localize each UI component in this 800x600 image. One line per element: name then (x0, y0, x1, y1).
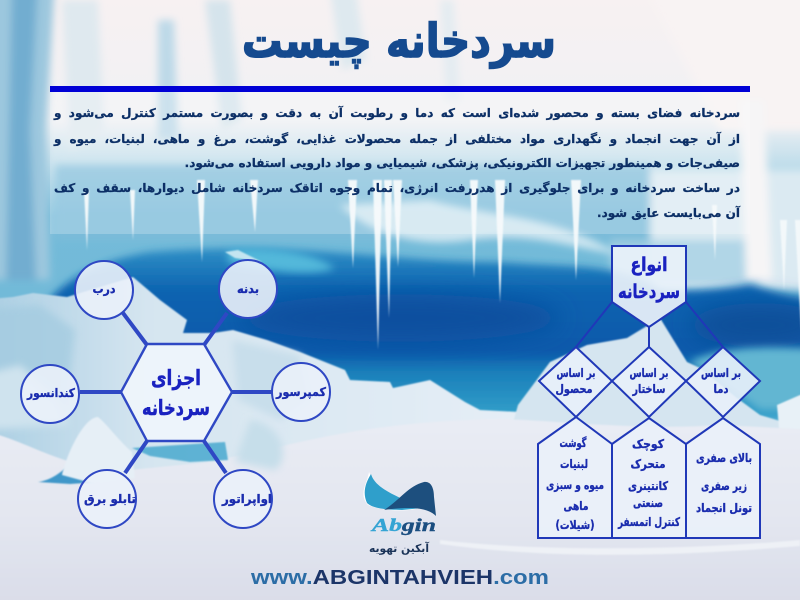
diamond: by temperature (686, 347, 760, 417)
paragraph text: در ساخت سردخانه و برای جلوگیری از هدررفت انرژی، تمام وجوه اتاقک سردخانه شامل دیوارها، سقف و کف (54, 181, 740, 195)
icicles (84, 180, 800, 350)
title underline (50, 86, 750, 92)
hexagon: center: سردخانه (142, 396, 210, 420)
snow field (0, 419, 800, 600)
circle: condenser: کندانسور (26, 386, 75, 401)
paragraph text: آن می‌بایست عایق شود. (597, 206, 740, 220)
tree connectors (576, 302, 723, 347)
diamond: by temperature: دما (714, 382, 728, 396)
box: product list: میوه و سبزی (546, 478, 604, 493)
box: temperature list: بالای صفری (696, 451, 752, 465)
box: temperature list: تونل انجماد (696, 501, 752, 516)
ice bergs (0, 277, 540, 490)
logo: Abgin: آبکین تهویه (369, 541, 429, 555)
circle: electrical panel (78, 470, 136, 528)
paragraph text (53, 106, 740, 220)
hexagon: center (121, 344, 232, 441)
paragraph text: سردخانه فضای بسته و محصور شده‌ای است که دما و رطوبت آن به دقت و بصورت مستمر کنترل می‌شود و (54, 106, 740, 120)
box: product list: لبنیات (560, 457, 588, 471)
circle: door: درب (92, 282, 116, 296)
box: types heading: سردخانه (618, 281, 680, 303)
box: structure list: کوچک (632, 437, 664, 452)
circle: electrical panel: تابلو برق (84, 492, 136, 507)
box: structure list: متحرک (630, 457, 666, 471)
title: سردخانه چیست (242, 14, 556, 69)
circle: evaporator: اواپراتور (221, 492, 272, 507)
diamond: by product (539, 347, 612, 417)
diamond: by structure: بر اساس (630, 366, 668, 380)
box: temperature list (686, 418, 760, 538)
paragraph text: صیفی‌جات و همینطور تجهیزات الکترونیکی، پزشکی، شیمیایی و مواد دارویی استفاده می‌شود. (185, 156, 740, 170)
box: product list: ماهی (564, 499, 588, 513)
box: structure list: کانتینری (628, 479, 668, 493)
box: types heading: انواع (630, 254, 668, 276)
logo: Abgin: Ab gin (371, 515, 436, 535)
diagram: types of cold store (538, 246, 760, 538)
circle: body (219, 260, 277, 318)
diamond: by structure: ساختار (632, 382, 666, 396)
text panel (50, 92, 750, 234)
paragraph text: از آن جهت انجماد و نگهداری مواد مختلفی از جمله محصولات غذایی، گوشت، مرغ و ماهی، لبنیات، میوه و (54, 132, 740, 146)
circle: door (75, 261, 133, 319)
logo: Abgin (363, 472, 436, 555)
box: types heading (612, 246, 686, 327)
circle: evaporator (214, 470, 272, 528)
box: product list: (شیلات) (556, 518, 594, 532)
diamond: by structure (612, 347, 686, 417)
circle: compressor: کمپرسور (275, 385, 326, 400)
box: structure list: کنترل اتمسفر (617, 515, 680, 529)
box: structure list (612, 418, 686, 538)
diamond: by product: محصول (556, 382, 592, 397)
box: product list: گوشت (560, 436, 587, 451)
website url: www. ABGINTAHVIEH .com (250, 567, 549, 589)
arch highlight (340, 200, 620, 255)
diamond: by temperature: بر اساس (701, 366, 741, 380)
connectors (80, 313, 272, 473)
circle: compressor (272, 363, 330, 421)
box: temperature list: زیر صفری (701, 479, 747, 493)
diamond: by product: بر اساس (556, 366, 596, 380)
circle: condenser (21, 365, 79, 423)
hexagon: center: اجزای (151, 366, 201, 390)
cave opening (30, 248, 800, 420)
ice wall streaks (0, 0, 800, 290)
circle: body: بدنه (237, 282, 259, 296)
box: structure list: صنعتی (633, 496, 663, 510)
box: product list (538, 417, 612, 538)
